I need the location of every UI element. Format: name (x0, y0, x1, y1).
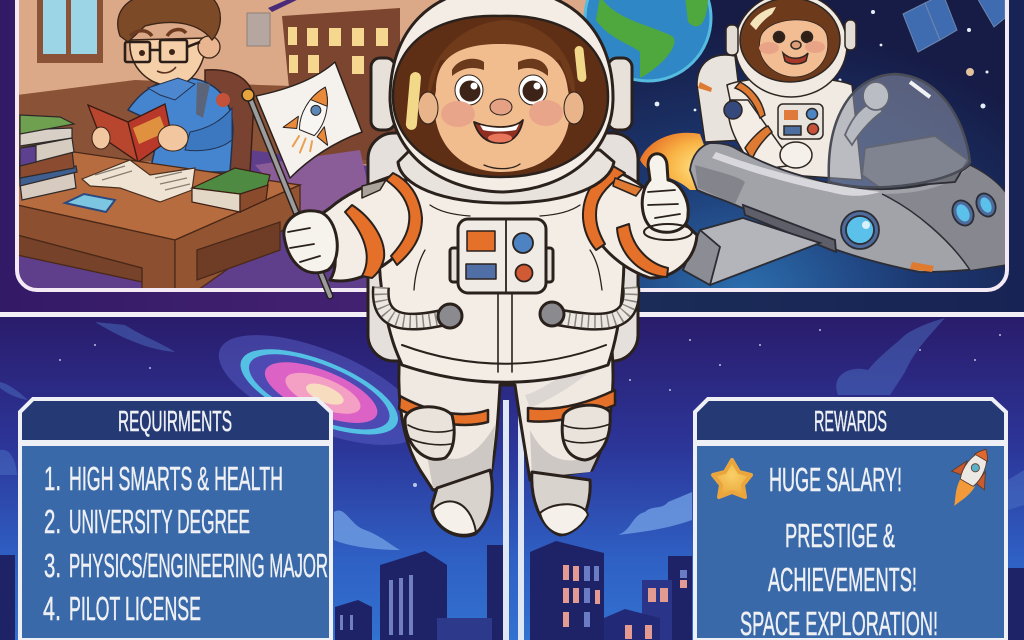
stars (59, 329, 1001, 487)
requirements list: 4. (43, 590, 61, 627)
green book (192, 168, 270, 212)
poster (247, 13, 270, 46)
clouds (0, 318, 1024, 510)
left arm (320, 173, 422, 281)
wainscot (19, 80, 366, 164)
satellite (903, 0, 1005, 52)
chest panel (778, 104, 823, 139)
requirements list: 1. (44, 460, 61, 497)
open book (82, 160, 195, 202)
right glove (642, 154, 692, 240)
rewards header (695, 399, 1006, 442)
rewards list: PRESTIGE & (785, 517, 895, 554)
background: top band (0, 0, 1024, 320)
night sky details (0, 312, 1024, 640)
requirements list: 2. (44, 503, 61, 540)
rewards list (740, 461, 938, 640)
galaxy (218, 335, 406, 445)
astronaut (242, 0, 697, 536)
requirements list: PHYSICS/ENGINEERING MAJOR (69, 547, 328, 584)
vertical rails (503, 400, 524, 640)
engine flame (640, 132, 704, 190)
city right (530, 541, 1024, 640)
divider (0, 312, 1024, 317)
small astronaut (697, 0, 862, 180)
building model (268, 0, 400, 160)
chair (205, 70, 254, 172)
knee pads (405, 407, 454, 459)
icon: star (713, 460, 751, 497)
red book (88, 104, 172, 162)
city left (0, 545, 505, 640)
floor (17, 150, 400, 288)
rewards body (695, 444, 1006, 640)
panel: rewards: REWARDS (814, 406, 887, 438)
background: night sky (0, 317, 1024, 640)
requirements list: PILOT LICENSE (69, 590, 201, 627)
rocket on flag (277, 78, 347, 161)
legs (399, 350, 615, 536)
left glove (284, 211, 337, 273)
panel: requirements (20, 399, 331, 640)
rewards list: HUGE SALARY! (769, 461, 902, 498)
wing (683, 218, 820, 285)
boy reading (88, 0, 233, 172)
visor glints (405, 72, 421, 130)
requirements list: HIGH SMARTS & HEALTH (69, 460, 283, 497)
panel frame (17, 0, 1007, 290)
requirements list: 3. (44, 547, 61, 584)
icon: rocket (937, 440, 1002, 515)
boots (432, 470, 492, 536)
panel: study scene (19, 0, 586, 288)
heading: REQUIRMENTS (118, 406, 232, 438)
seat and arm in dome (862, 136, 968, 188)
earth (585, 0, 711, 81)
requirements body (20, 444, 331, 640)
book stack (20, 115, 77, 200)
backpack (368, 133, 638, 361)
requirements list: UNIVERSITY DEGREE (69, 503, 250, 540)
helmet (371, 0, 632, 203)
hoses (381, 287, 631, 328)
ship (683, 74, 1010, 285)
tablet (65, 194, 115, 212)
requirements header (20, 399, 331, 442)
requirements list (43, 460, 328, 627)
torso (379, 180, 624, 382)
stars (654, 10, 988, 112)
panel: space scene (585, 0, 1010, 292)
window (37, 0, 103, 63)
desk (17, 152, 300, 290)
face (418, 20, 584, 172)
chest panel (450, 219, 553, 293)
right arm (583, 166, 697, 278)
dome (829, 74, 970, 187)
panel: rewards (695, 399, 1006, 640)
flag (242, 62, 362, 296)
portholes (841, 211, 879, 249)
